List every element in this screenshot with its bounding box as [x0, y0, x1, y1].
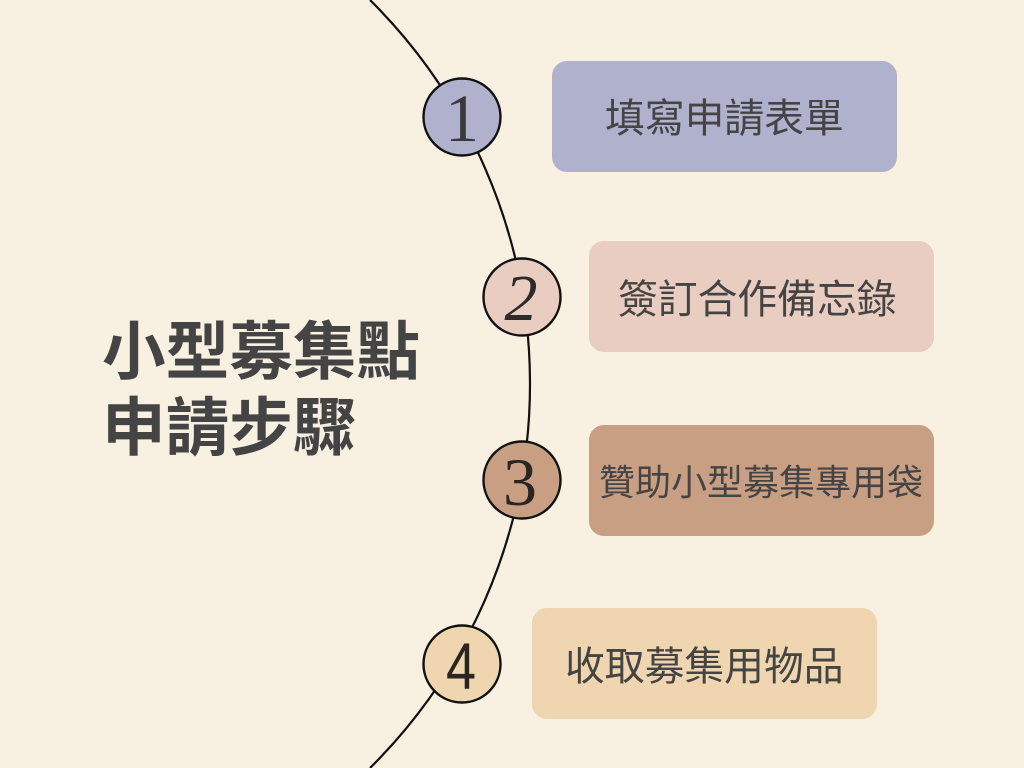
title — [102, 317, 420, 464]
step 1 circle: 1 — [445, 80, 479, 156]
step 3 circle: 3 — [503, 444, 537, 520]
step 4 label: 收取募集用物品 — [565, 645, 844, 689]
step 1 label: 填寫申請表單 — [605, 97, 844, 141]
step 3 label: 贊助小型募集專用袋 — [599, 462, 923, 503]
step 2 label: 簽訂合作備忘錄 — [618, 278, 897, 322]
step 1 label — [552, 61, 897, 172]
step 3 circle — [484, 442, 560, 520]
step 4 circle — [424, 626, 500, 703]
step 1 circle — [424, 78, 500, 156]
step 4 label — [532, 608, 877, 719]
title: 申請步驟 — [102, 393, 356, 464]
step 4 circle: 4 — [446, 629, 476, 703]
step 3 label — [589, 425, 934, 536]
step 2 circle: 2 — [504, 262, 538, 335]
title: 小型募集點 — [102, 317, 420, 388]
arc line — [370, 0, 530, 768]
step 2 label — [589, 241, 934, 352]
step 2 circle — [484, 258, 560, 336]
